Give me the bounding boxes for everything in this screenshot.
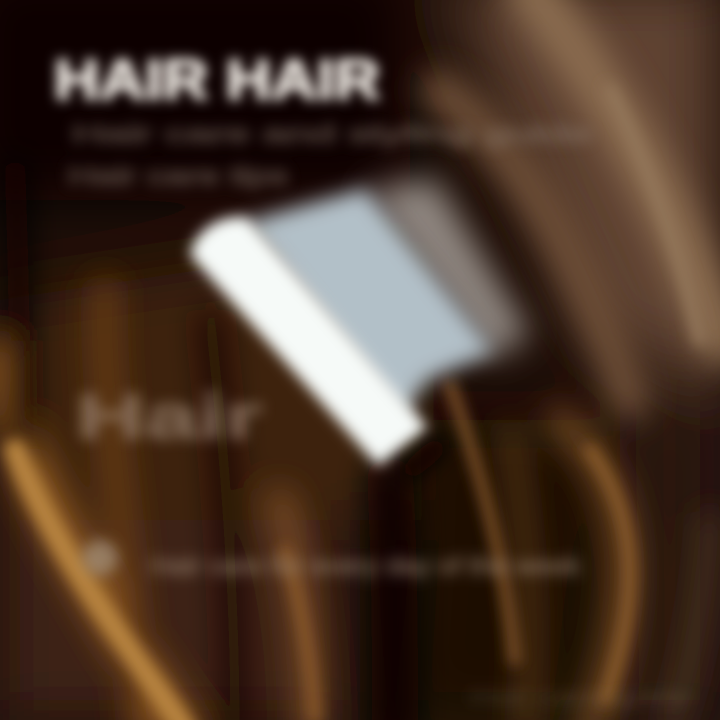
title: HAIR HAIR — [54, 48, 380, 112]
subtitle text: Hair care tips — [68, 163, 288, 190]
subtitle text: Hair care and styling guide — [72, 121, 592, 148]
footer bullet icon — [82, 540, 118, 576]
footer line text: Hair care for every day of the week — [150, 553, 581, 580]
middle text block: Hair — [76, 383, 262, 452]
small credit text: Hair care guide — [470, 687, 690, 709]
footer line text — [82, 540, 581, 580]
comb teeth near section — [245, 188, 495, 420]
comb teeth far section — [365, 178, 530, 358]
comb shadow — [396, 432, 448, 482]
subtitle text — [68, 121, 592, 190]
comb icon — [190, 178, 530, 482]
comb spine — [190, 217, 428, 466]
